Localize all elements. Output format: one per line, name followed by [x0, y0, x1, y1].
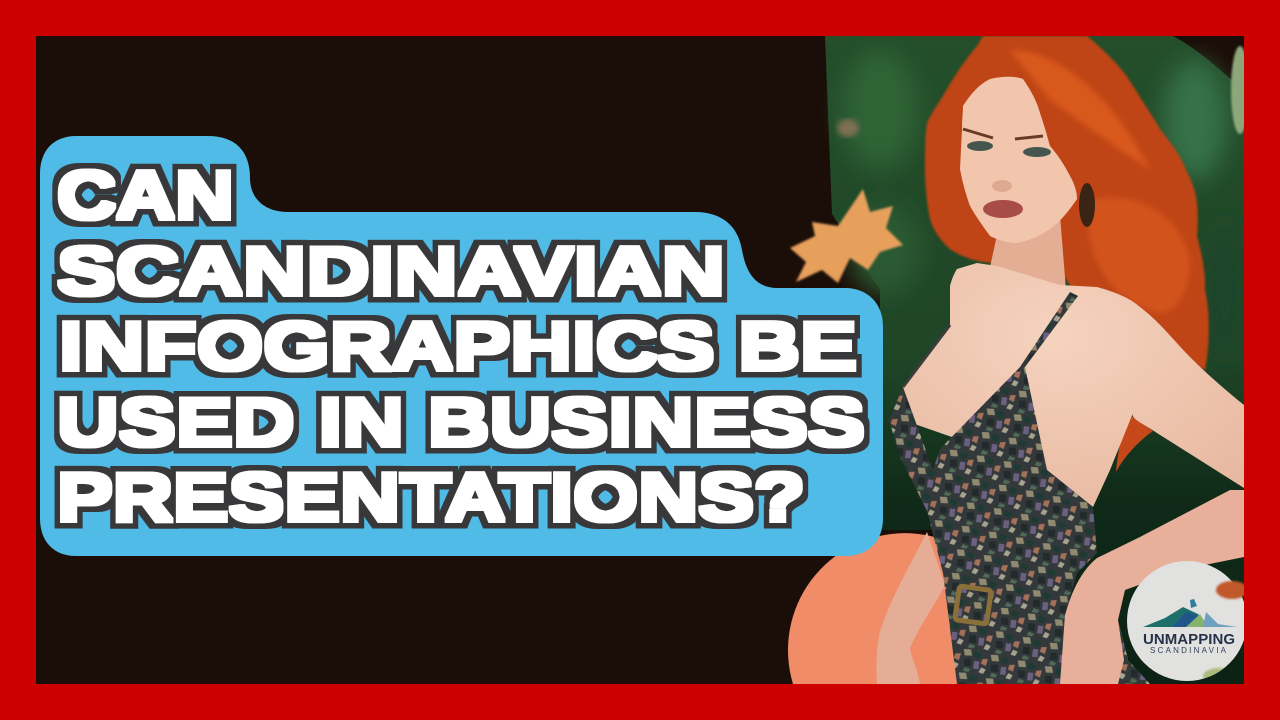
logo subtitle: SCANDINAVIA	[1150, 646, 1227, 655]
title text: PRESENTATIONS?	[57, 460, 805, 536]
title callout background	[40, 136, 883, 556]
torso and upper arm	[903, 263, 1244, 507]
logo wordmark: UNMAPPING	[1143, 631, 1235, 648]
dress	[889, 292, 1097, 684]
logo badge	[1127, 561, 1248, 684]
icon: maple leaf	[790, 189, 903, 283]
hair	[925, 36, 1209, 370]
title text: SCANDINAVIAN	[57, 234, 725, 310]
title text: USED IN BUSINESS	[57, 384, 865, 460]
lips	[983, 200, 1023, 218]
face	[960, 77, 1077, 243]
orange leaf on badge	[1216, 581, 1248, 599]
belt buckle	[955, 586, 991, 624]
title text: CAN	[57, 158, 234, 234]
title text	[57, 158, 865, 536]
decorative orange circle	[788, 533, 957, 684]
title text: INFOGRAPHICS BE	[59, 308, 857, 384]
green leaf on badge	[1202, 666, 1225, 678]
dress hem beyond hand	[1118, 620, 1150, 684]
left arm	[876, 532, 945, 684]
eyes	[967, 141, 993, 151]
icon: mountain logo	[1143, 599, 1237, 627]
eyebrows	[963, 129, 1043, 139]
forearm and hand on hip	[1059, 490, 1244, 684]
hair lower curls	[1088, 198, 1190, 313]
nose shadow	[992, 180, 1012, 192]
earring	[1079, 183, 1095, 227]
pale leaf top right	[1230, 44, 1244, 135]
woman figure: stylised illustration	[876, 36, 1244, 684]
hair highlight	[1010, 50, 1150, 170]
left strap	[903, 325, 950, 387]
neck	[990, 220, 1066, 286]
photo panel: garden background	[788, 36, 1249, 684]
hair behind torso	[1116, 415, 1153, 472]
